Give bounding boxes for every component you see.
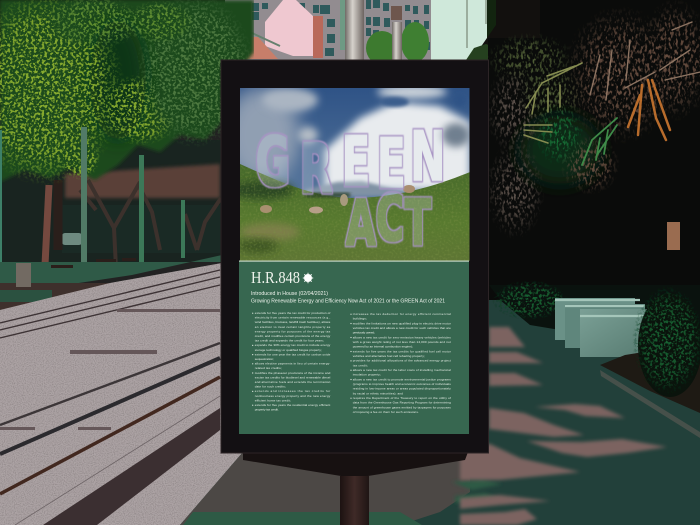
drainage strip bbox=[43, 408, 220, 525]
right shrubs and curb bbox=[600, 280, 700, 438]
left column bullet list: modifies the phaseout provisions of the income and bbox=[255, 371, 331, 375]
left column bullet list: sequestration; bbox=[255, 357, 274, 361]
tree trunks bbox=[42, 179, 220, 262]
billboard frame bbox=[221, 60, 488, 453]
left column bullet list: related tax credits; bbox=[255, 366, 282, 370]
palm frond highlights bbox=[524, 22, 700, 165]
cows bbox=[260, 185, 415, 214]
title: GREEN ACT in bubble letters bbox=[256, 127, 444, 248]
right column bullet list: vehicles tax credit and allows a new credit for such vehicles that are bbox=[353, 326, 451, 330]
right column bullet list: provides for additional allocations of the advanced energy project bbox=[353, 359, 451, 363]
meadow hills bbox=[240, 164, 470, 262]
lamp poles bbox=[81, 127, 87, 276]
right column bullet list: insulation property; bbox=[353, 373, 381, 377]
right column bullet list: modifies the limitations on new qualified plug-in electric drive motor bbox=[353, 321, 451, 325]
left column bullet list: electricity from certain renewable resources (e.g., bbox=[255, 316, 330, 320]
left column bullet list: tax credit and expands the credit for four years; bbox=[255, 339, 324, 343]
left column bullet list: energy property for purposes of the energy tax bbox=[255, 329, 331, 333]
distant mountain bbox=[304, 181, 409, 197]
subheading: Introduced in House (02/04/2021) bbox=[251, 291, 328, 297]
title: GREEN ACT in bubble letters: ACT bbox=[346, 184, 431, 261]
background: paving at right of platform bbox=[180, 290, 700, 525]
canopy bbox=[0, 0, 254, 182]
tram tracks upper bbox=[0, 270, 220, 338]
left column bullet list: credit, and modifies certain provisions of the energy bbox=[255, 334, 331, 338]
left column bullet list: an election to treat certain tangible property as bbox=[255, 325, 331, 329]
heading: H.R.848: H.R.848 bbox=[251, 268, 300, 287]
right column bullet list: residing in low-income areas or areas populated disproportionately bbox=[353, 387, 451, 391]
left column bullet list: property tax credit. bbox=[255, 408, 279, 412]
tram tracks lower bbox=[0, 343, 220, 525]
background: right palm trees bbox=[480, 0, 700, 300]
left column bullet list: extends for five years the tax credit for production of bbox=[255, 311, 330, 315]
title: GREEN ACT in bubble letters: GREEN bbox=[255, 117, 445, 209]
background: sky and buildings bbox=[0, 0, 700, 120]
left column bullet list: excise tax credits for biodiesel and renewable diesel bbox=[255, 375, 331, 379]
right column bullet list: with a gross weight rating of not less than 14,000 pounds and not bbox=[353, 340, 451, 344]
left column bullet list: expands the 30% energy tax credit to include energy bbox=[255, 343, 331, 347]
right column bullet list: (programs to improve health and economic outcomes of individuals bbox=[353, 382, 451, 386]
background: concrete tram platform bbox=[0, 263, 243, 525]
background: sunlit patches on right paving bbox=[460, 327, 667, 525]
left column bullet list: extends for five years the residential energy efficient bbox=[255, 403, 330, 407]
left column bullet list: extends for one year the tax credit for carbon oxide bbox=[255, 352, 331, 356]
right column bullet list: allows a new tax credit for zero-emission heavy vehicles (vehicles bbox=[353, 335, 451, 339]
palm foliage bbox=[489, 2, 700, 236]
background: left trees bbox=[0, 0, 254, 262]
planters bbox=[488, 270, 700, 357]
right column bullet list: extends for five years the tax credits for qualified fuel cell motor bbox=[353, 349, 451, 353]
left column bullet list: nonbusiness energy property and the new energy bbox=[255, 394, 331, 398]
right column bullet list: buildings; bbox=[353, 317, 367, 321]
subheading bbox=[251, 291, 445, 305]
left column bullet list: extends and increases the tax credits for bbox=[255, 389, 330, 393]
poster photo: meadow under cloudy sky bbox=[224, 85, 470, 262]
right column bullet list: data from the Greenhouse Gas Reporting Program for determining bbox=[353, 401, 451, 405]
left column bullet list: efficient home tax credit; bbox=[255, 398, 291, 402]
left column bullet list: wind facilities, biomass, landfill trash facilities), allows bbox=[255, 320, 331, 324]
right column bullet list: vehicles and alternative fuel cell refueling property; bbox=[353, 354, 425, 358]
right column bullet list: by racial or ethnic minorities); and bbox=[353, 391, 403, 395]
right column bullet list bbox=[351, 312, 451, 414]
left column bullet list: and alternative fuels and extends the termination bbox=[255, 380, 331, 384]
right column bullet list: allows a new tax credit for the labor costs of installing mechanical bbox=[353, 368, 451, 372]
clouds bbox=[224, 85, 470, 190]
icon: white starburst bbox=[303, 273, 313, 283]
background: pole above billboard bbox=[345, 0, 402, 60]
right column bullet list: powered by an internal combustion engine); bbox=[353, 345, 413, 349]
left column bullet list: storage technology or qualified biogas property; bbox=[255, 348, 322, 352]
left column bullet list: allows elective payments in lieu of certain energy- bbox=[255, 362, 330, 366]
right column bullet list: tax credit; bbox=[353, 363, 368, 367]
left column bullet list bbox=[253, 311, 331, 412]
poster green text panel bbox=[239, 260, 469, 434]
right column bullet list: allows a new tax credit to promote environmental justice programs bbox=[353, 377, 451, 381]
right column bullet list: previously owned; bbox=[353, 331, 375, 335]
left column bullet list: date for such credits; bbox=[255, 385, 286, 389]
white and pink building bbox=[265, 0, 313, 56]
right column bullet list: requires the Department of the Treasury to report on the utility of bbox=[353, 396, 451, 400]
billboard stand bbox=[243, 452, 468, 525]
right column bullet list: the amount of greenhouse gases emitted by taxpayers for purposes bbox=[353, 405, 451, 409]
subheading: Growing Renewable Energy and Efficiency Now Act of 2021 or the GREEN Act of 2021 bbox=[251, 299, 445, 305]
right column bullet list: of imposing a fee on them for such emissions. bbox=[353, 410, 419, 414]
background: left park benches and lawn bbox=[0, 255, 222, 310]
right column bullet list: increases the tax deduction for energy efficient commercial bbox=[353, 312, 451, 316]
